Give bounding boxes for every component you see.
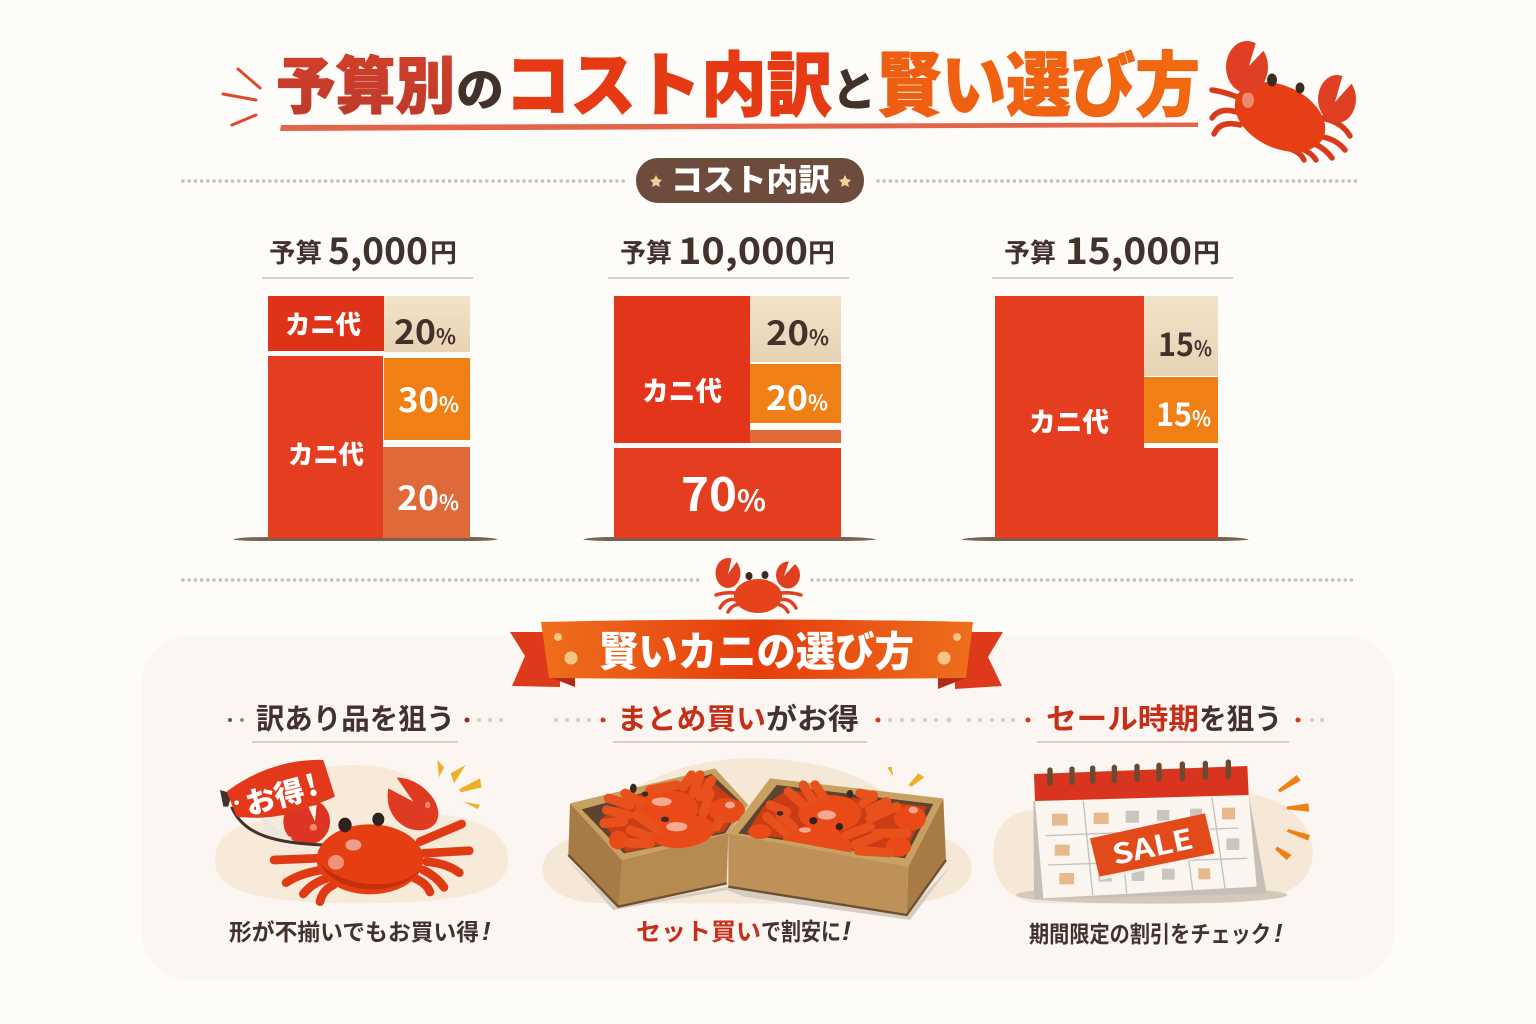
segment: 30 percent orange: 30 xyxy=(398,374,439,422)
ribbon body xyxy=(541,620,973,679)
dotted divider: tips section xyxy=(183,578,1355,582)
segment: 30 percent orange xyxy=(384,358,470,440)
chart heading: budget 15000: 15,000 xyxy=(1065,223,1192,275)
tip 2: bulk buying xyxy=(543,696,972,947)
segment: crab cost main: カニ代 xyxy=(288,435,364,472)
tip caption: ! xyxy=(482,916,491,946)
chart base shadow xyxy=(233,537,498,541)
tip caption: で割安に xyxy=(761,912,841,947)
segment: 15 percent tan: 15 xyxy=(1158,320,1194,366)
segment: crab cost: カニ代 xyxy=(642,370,722,409)
section pill: cost breakdown xyxy=(636,155,864,203)
segment: small salmon xyxy=(750,430,841,443)
segment: 20 percent tan xyxy=(750,296,841,362)
chart base shadow xyxy=(961,537,1249,541)
segment: 70 percent xyxy=(614,448,841,538)
chart heading: budget 15000: 円 xyxy=(1193,233,1220,270)
segment: 20 percent salmon xyxy=(383,447,470,538)
tip heading: がお得 xyxy=(766,696,859,738)
segment: 70 percent: % xyxy=(737,478,766,520)
segment: crab cost main xyxy=(268,356,383,538)
chart heading: budget 10000: 円 xyxy=(808,233,835,270)
tip caption: ! xyxy=(842,916,851,946)
tip caption: 期間限定の割引をチェック xyxy=(1029,915,1271,949)
chart heading: budget 5000: 円 xyxy=(430,233,457,270)
segment: 70 percent: 70 xyxy=(681,459,737,525)
tip heading xyxy=(1037,696,1289,743)
segment: 15 percent orange: % xyxy=(1192,403,1211,433)
segment: 30 percent orange: % xyxy=(439,389,459,419)
icon: small crab xyxy=(716,557,801,613)
segment: crab cost xyxy=(995,296,1218,538)
ribbon stars xyxy=(554,633,961,664)
chart: budget 5000 xyxy=(233,223,498,541)
chart heading: budget 15000: 予算 xyxy=(1004,233,1056,270)
segment: 15 percent orange xyxy=(1144,377,1218,443)
tip heading: セール時期 xyxy=(1046,696,1199,738)
illustration: crab with tag: お得 xyxy=(240,767,309,824)
chart heading: budget 10000 xyxy=(608,223,849,279)
chart heading: budget 5000 xyxy=(262,223,473,279)
segment: crab cost xyxy=(614,296,750,443)
segment: crab cost top: カニ代 xyxy=(285,305,361,342)
segment: crab cost: カニ代 xyxy=(1029,401,1109,440)
left box xyxy=(568,768,748,907)
ribbon tails xyxy=(510,632,560,687)
title: と xyxy=(832,54,876,120)
title xyxy=(276,30,1200,131)
title: の xyxy=(456,54,504,120)
tip heading: まとめ買い xyxy=(617,696,766,738)
icon: title accent sparks xyxy=(223,69,260,125)
segment: 15 percent tan xyxy=(1144,296,1218,376)
segment: 20 percent salmon: 20 xyxy=(397,472,439,520)
chart: budget 15000 xyxy=(961,223,1249,541)
title: 賢い選び方 xyxy=(877,30,1200,131)
section dots row xyxy=(228,718,1324,722)
illustration: sale calendar: SALE xyxy=(1108,818,1197,874)
tip caption: ! xyxy=(1274,918,1283,948)
segment: 20 percent orange xyxy=(750,364,841,423)
tip caption: 形が不揃いでもお買い得 xyxy=(229,913,479,947)
panel: smart choices xyxy=(142,636,1394,980)
segment: crab cost top xyxy=(268,296,384,351)
ribbon banner xyxy=(510,618,1003,689)
dotted divider: cost section xyxy=(183,179,1357,183)
tip 3: sale season xyxy=(993,696,1313,949)
tip heading: を狙う xyxy=(1199,696,1282,738)
illustration: crab with tag xyxy=(215,760,508,903)
chart: budget 10000 xyxy=(583,223,877,541)
segment: 20 percent orange: 20 xyxy=(766,372,808,420)
chart heading: budget 10000: 予算 xyxy=(620,233,672,270)
segment: 15 percent tan: % xyxy=(1194,333,1212,363)
segment: 20 percent tan xyxy=(384,296,470,354)
chart base shadow xyxy=(583,537,877,541)
icon: title crab xyxy=(1212,39,1356,166)
title: 予算別 xyxy=(276,36,455,126)
illustration: crab boxes xyxy=(543,758,972,920)
right box xyxy=(728,778,946,915)
title: コスト内訳 xyxy=(505,30,832,131)
ribbon heading: 賢いカニの選び方 xyxy=(599,618,914,678)
chart heading: budget 5000: 5,000 xyxy=(328,223,428,275)
segment: 20 percent orange: % xyxy=(808,387,828,417)
chart heading: budget 5000: 予算 xyxy=(269,233,322,270)
chart heading: budget 10000: 10,000 xyxy=(678,223,808,275)
tip heading: 訳あり品を狙う xyxy=(256,696,455,738)
section pill: cost breakdown: コスト内訳 xyxy=(671,155,830,200)
segment: 20 percent salmon: % xyxy=(439,487,459,517)
chart heading: budget 15000 xyxy=(992,223,1233,279)
title underline xyxy=(280,122,1198,131)
segment: 20 percent tan: 20 xyxy=(394,306,436,354)
segment: 20 percent tan: % xyxy=(809,322,829,352)
tip heading xyxy=(613,696,867,743)
tip caption xyxy=(636,912,851,947)
illustration: sale calendar xyxy=(993,762,1313,904)
tip caption: セット買い xyxy=(636,912,761,947)
segment: 20 percent tan: 20 xyxy=(766,307,809,355)
segment: 15 percent orange: 15 xyxy=(1156,390,1192,436)
illustration: crab with tag: ! xyxy=(300,762,322,806)
tip 1: damaged goods xyxy=(215,696,508,947)
segment: 20 percent tan: % xyxy=(436,321,456,351)
